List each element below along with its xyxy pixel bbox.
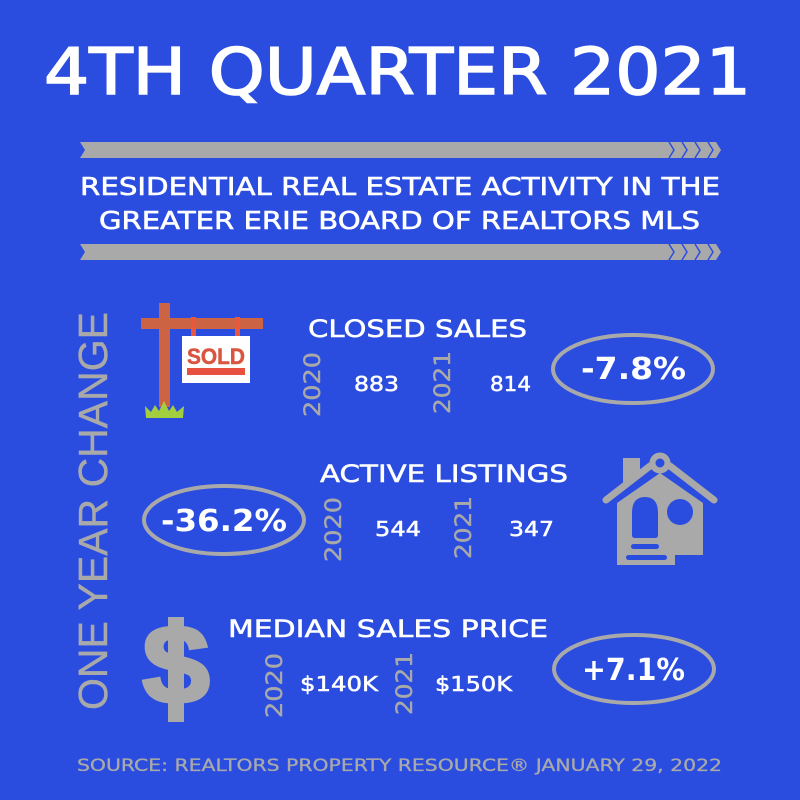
median price 2020 value: $140K: [300, 672, 379, 696]
bottom arrow banner: [80, 244, 721, 260]
median price change callout: +7.1%: [582, 653, 685, 688]
icon: sold sign: SOLD: [187, 344, 245, 369]
closed sales heading: CLOSED SALES: [308, 315, 527, 343]
closed sales 2020 year: 2020: [301, 352, 326, 417]
subtitle: RESIDENTIAL REAL ESTATE ACTIVITY IN THE: [80, 172, 720, 201]
median price 2020 year: 2020: [263, 653, 288, 718]
active listings change callout: [144, 486, 304, 554]
median price 2021 year: 2021: [393, 652, 418, 715]
icon: sold sign: [141, 303, 263, 418]
active listings 2021 value: 347: [509, 517, 554, 541]
median price 2021 value: $150K: [435, 672, 513, 696]
active listings 2021 year: 2021: [452, 496, 477, 559]
closed sales 2020 value: 883: [354, 372, 399, 396]
median price change callout: [554, 635, 714, 703]
icon: dollar sign: $: [142, 602, 210, 727]
title: 4TH QUARTER 2021: [44, 36, 751, 110]
source line: SOURCE: REALTORS PROPERTY RESOURCE® JANUARY 29, 2022: [77, 756, 722, 776]
icon: house: [606, 456, 714, 565]
median sales price heading: MEDIAN SALES PRICE: [228, 615, 548, 643]
closed sales change callout: [553, 335, 713, 403]
subtitle: GREATER ERIE BOARD OF REALTORS MLS: [99, 206, 700, 235]
subtitle: [80, 172, 720, 235]
active listings change callout: -36.2%: [161, 504, 287, 539]
closed sales 2021 value: 814: [490, 372, 531, 396]
top arrow banner: [80, 142, 721, 158]
vertical label: one year change: ONE YEAR CHANGE: [70, 312, 116, 710]
active listings 2020 year: 2020: [322, 497, 347, 562]
active listings 2020 value: 544: [375, 517, 421, 541]
active listings heading: ACTIVE LISTINGS: [320, 460, 568, 488]
closed sales 2021 year: 2021: [431, 351, 456, 414]
closed sales change callout: -7.8%: [581, 352, 686, 387]
